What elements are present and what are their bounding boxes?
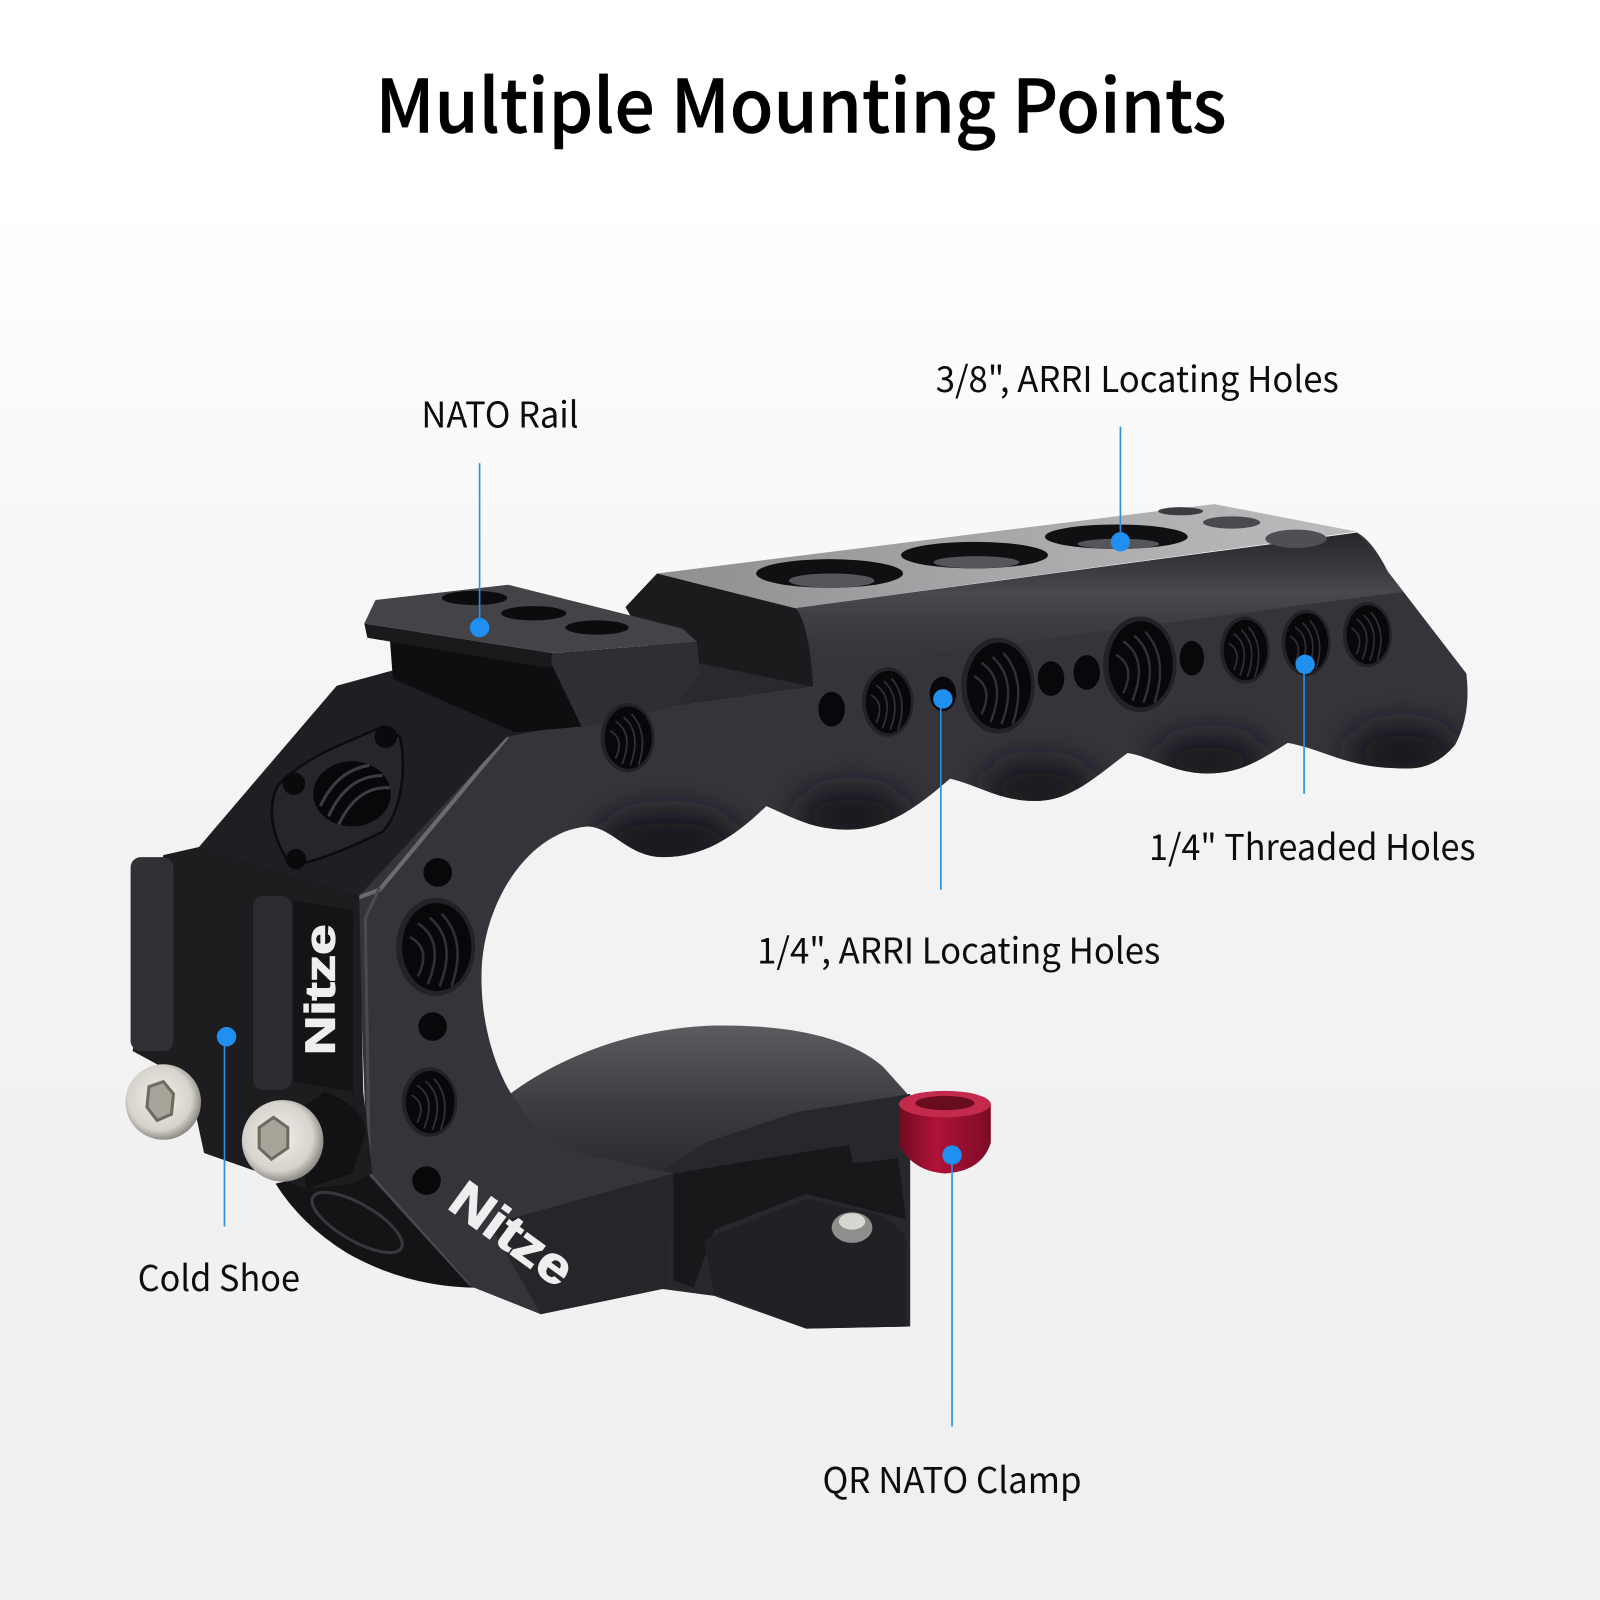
callout: NATO Rail (421, 388, 579, 637)
product: camera top handle (126, 504, 1468, 1329)
notch (676, 663, 813, 706)
logo on body: Nitze (439, 1170, 585, 1298)
title: Multiple Mounting Points (376, 49, 1227, 155)
red knob (899, 1091, 991, 1173)
top rail face (657, 504, 1357, 608)
callout: 3/8" ARRI locating holes: 3/8", ARRI Locating Holes (936, 352, 1339, 403)
main handle body (357, 533, 1468, 1314)
callout: cold shoe: Cold Shoe (138, 1251, 300, 1302)
lower arm top surface (510, 1025, 910, 1209)
callout: QR NATO clamp (822, 1145, 1082, 1504)
cold shoe (131, 847, 372, 1189)
underside of cold shoe base (276, 1163, 480, 1288)
holes along the handle (396, 602, 1392, 1195)
top chamfer band (795, 533, 1403, 668)
rail end face (626, 573, 813, 706)
rail end face upper (626, 573, 813, 687)
NATO rail block (364, 585, 700, 733)
callout: 1/4" ARRI locating holes: 1/4", ARRI Locating Holes (757, 923, 1160, 974)
callout: 1/4" threaded holes: 1/4" Threaded Holes (1149, 820, 1476, 871)
callout: NATO Rail: NATO Rail (421, 388, 579, 439)
callout: cold shoe (138, 1027, 300, 1302)
callout: 1/4" threaded holes (1149, 655, 1476, 871)
logo on cold shoe: Nitze (297, 924, 344, 1055)
rosette with threaded hole (272, 726, 403, 869)
callout: QR NATO clamp: QR NATO Clamp (822, 1453, 1082, 1504)
QR NATO clamp body (612, 1094, 910, 1329)
callout: 1/4" ARRI locating holes (757, 689, 1160, 974)
grip shading (357, 724, 1459, 1314)
angled mounting face (199, 670, 582, 908)
screws (126, 1064, 323, 1182)
callout: 3/8" ARRI locating holes (936, 352, 1339, 552)
